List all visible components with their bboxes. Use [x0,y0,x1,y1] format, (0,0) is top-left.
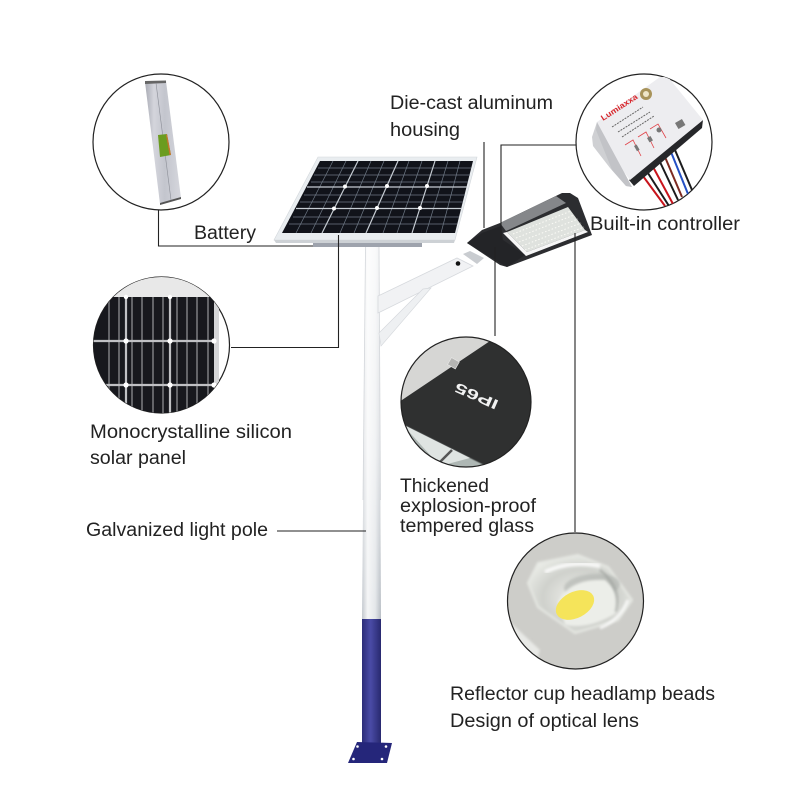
callout: battery [93,74,229,210]
brand label: Lumiaxxa [599,92,640,123]
pole arm [378,258,473,313]
callout: tempered glass detail [400,336,532,468]
label: monocrystalline silicon solar panel: solar panel [90,448,186,469]
light pole [348,247,473,763]
label: die-cast aluminum housing [390,93,553,141]
label: built-in controller: Built-in controller [590,214,741,235]
label: tempered glass: tempered glass [400,516,534,537]
leader lines [158,142,576,532]
callout: controller [576,74,712,210]
label: die-cast aluminum housing: Die-cast aluminum [390,93,553,114]
label: tempered glass: Thickened [400,476,489,497]
label: monocrystalline silicon solar panel [90,422,292,469]
label: monocrystalline silicon solar panel: Monocrystalline silicon [90,422,292,443]
wires [640,150,692,206]
IP65 mark: IP65 [452,379,501,413]
label: reflector cup and optical lens: Design of optical lens [450,711,639,732]
label: tempered glass: explosion-proof [400,496,537,517]
label: battery: Battery [194,223,257,244]
label: galvanized light pole: Galvanized light pole [86,520,268,541]
street lamp head [463,193,592,267]
label: reflector cup and optical lens [450,684,715,732]
label: die-cast aluminum housing: housing [390,120,460,141]
mounting flange [348,742,392,763]
solar panel [274,157,477,247]
label: reflector cup and optical lens: Reflector cup headlamp beads [450,684,715,705]
callout: optical lens [505,533,644,669]
label: tempered glass [400,476,537,537]
callout: solar panel detail [90,270,230,417]
blue pole base [362,619,381,747]
